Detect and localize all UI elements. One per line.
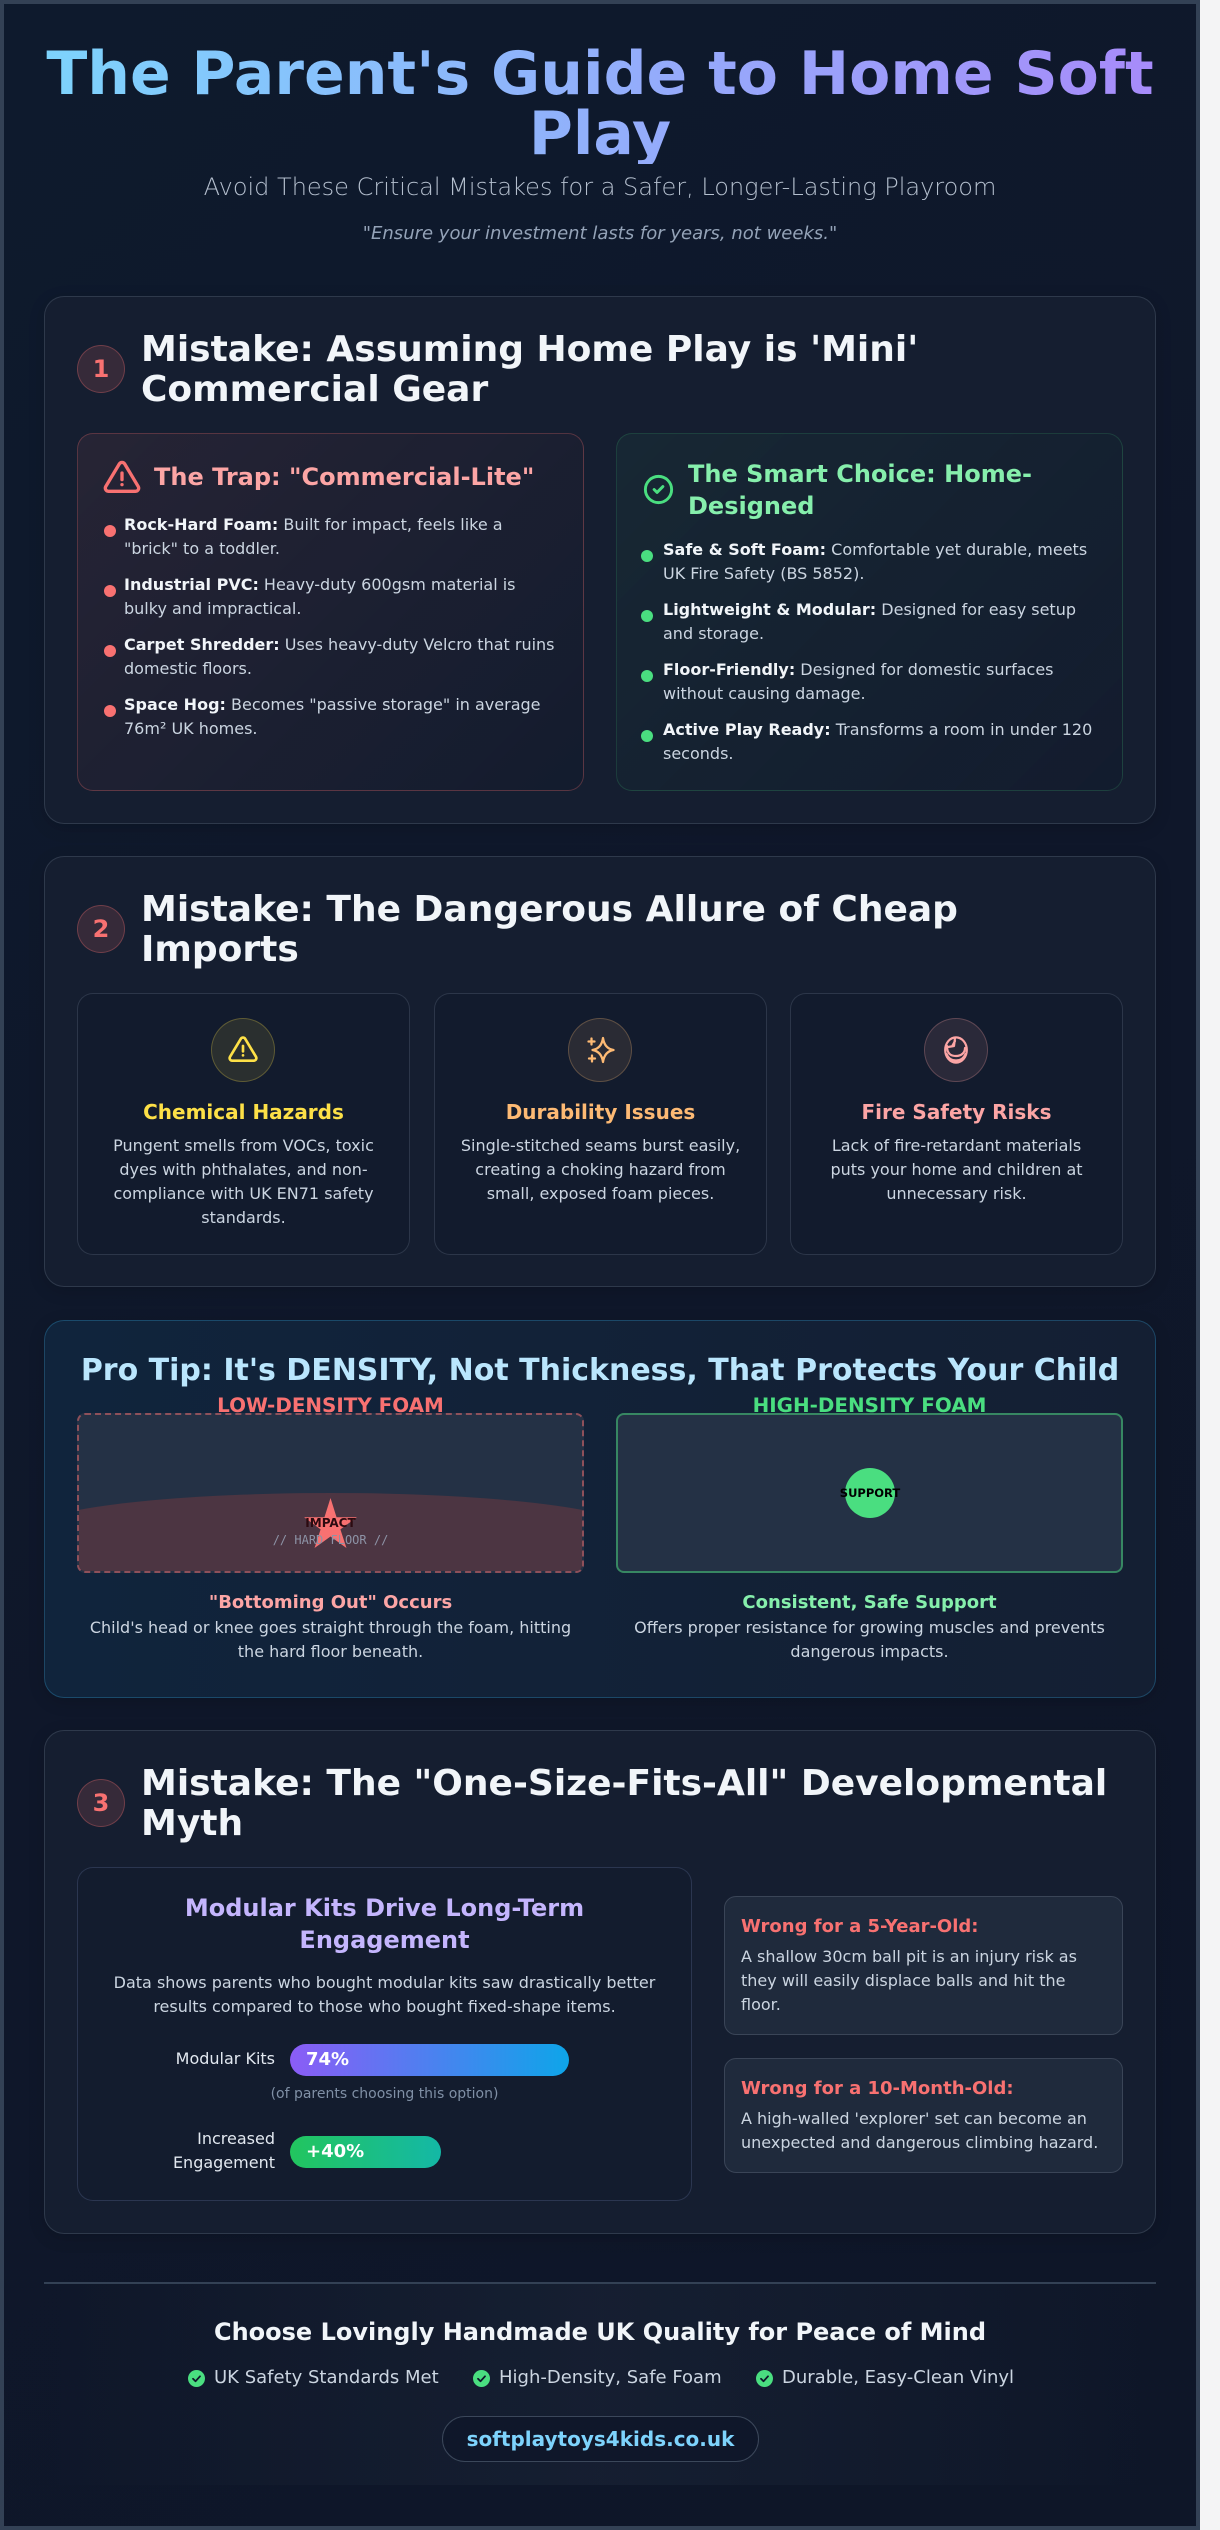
trap item: Industrial PVC: Heavy-duty 600gsm material is bbox=[124, 575, 516, 594]
durability heading: Durability Issues bbox=[506, 1100, 695, 1124]
smart item: Active Play Ready: Transforms a room in under 120 bbox=[663, 720, 1092, 739]
icon: flame bbox=[924, 1018, 988, 1082]
bottoming text: Child's head or knee goes straight through the foam, hitting bbox=[90, 1618, 571, 1637]
website pill: softplaytoys4kids.co.uk bbox=[467, 2427, 734, 2451]
panel: mistake 2 bbox=[44, 856, 1156, 1287]
step number 3 bbox=[77, 1779, 125, 1827]
card: fire safety risks bbox=[790, 993, 1123, 1255]
smart item bbox=[641, 540, 1087, 583]
icon: warning triangle bbox=[104, 460, 140, 493]
chart description bbox=[114, 1973, 656, 2016]
smart item bbox=[641, 720, 1092, 763]
title: Play bbox=[529, 99, 671, 169]
panel: the trap bbox=[77, 433, 584, 791]
chart heading: Engagement bbox=[299, 1926, 470, 1954]
chemical text: compliance with UK EN71 safety bbox=[113, 1184, 374, 1203]
chemical text: Pungent smells from VOCs, toxic bbox=[113, 1136, 374, 1155]
heading: mistake 3: Myth bbox=[141, 1803, 243, 1844]
label: increased engagement: Increased bbox=[197, 2129, 275, 2148]
smart item: UK Fire Safety (BS 5852). bbox=[663, 564, 864, 583]
bottoming heading: "Bottoming Out" Occurs bbox=[209, 1592, 452, 1613]
chart heading bbox=[185, 1894, 584, 1954]
heading: mistake 3 bbox=[141, 1763, 1107, 1844]
smart choice heading: Designed bbox=[688, 492, 814, 520]
trap item bbox=[104, 695, 540, 738]
support circle: SUPPORT bbox=[840, 1486, 900, 1500]
caption: safe support bbox=[634, 1592, 1105, 1661]
assurance: high density: High-Density, Safe Foam bbox=[499, 2367, 722, 2388]
durability text: small, exposed foam pieces. bbox=[487, 1184, 714, 1203]
trap item: Space Hog: Becomes "passive storage" in average bbox=[124, 695, 540, 714]
icon: warning triangle bbox=[211, 1018, 275, 1082]
support text: Offers proper resistance for growing muscles and prevents bbox=[634, 1618, 1105, 1637]
impact label: IMPACT bbox=[305, 1516, 356, 1530]
10-month text: A high-walled 'explorer' set can become an bbox=[741, 2109, 1087, 2128]
support circle bbox=[845, 1468, 895, 1518]
smart item: seconds. bbox=[663, 744, 733, 763]
title: The Parent's Guide to Home Soft bbox=[46, 39, 1154, 109]
10-month text: unexpected and dangerous climbing hazard. bbox=[741, 2133, 1098, 2152]
fire text: Lack of fire-retardant materials bbox=[832, 1136, 1081, 1155]
smart item: without causing damage. bbox=[663, 684, 866, 703]
support text: dangerous impacts. bbox=[790, 1642, 949, 1661]
smart item bbox=[641, 660, 1054, 703]
chart description: Data shows parents who bought modular kits saw drastically better bbox=[114, 1973, 655, 1992]
5-year text bbox=[741, 1947, 1077, 2014]
smart item bbox=[641, 600, 1076, 643]
floor label: // HARD FLOOR // bbox=[273, 1533, 388, 1547]
card: chemical hazards bbox=[77, 993, 410, 1255]
trap item: "brick" to a toddler. bbox=[124, 539, 280, 558]
smart choice heading: The Smart Choice: Home- bbox=[688, 460, 1032, 488]
support text bbox=[634, 1618, 1105, 1661]
header bbox=[46, 39, 1154, 244]
assurance: uk safety: UK Safety Standards Met bbox=[214, 2367, 439, 2388]
heading: mistake 1: Commercial Gear bbox=[141, 369, 488, 410]
5-year text: they will easily displace balls and hit the bbox=[741, 1971, 1065, 1990]
panel: mistake 1 bbox=[44, 296, 1156, 824]
step number 2 bbox=[77, 905, 125, 953]
chemical text: dyes with phthalates, and non- bbox=[119, 1160, 368, 1179]
label: high density: HIGH-DENSITY FOAM bbox=[753, 1394, 986, 1417]
trap item: bulky and impractical. bbox=[124, 599, 301, 618]
panel: mistake 3 bbox=[44, 1730, 1156, 2234]
footer heading: Choose Lovingly Handmade UK Quality for Peace of Mind bbox=[214, 2318, 986, 2346]
panel: the smart choice bbox=[616, 433, 1123, 791]
tagline quote: "Ensure your investment lasts for years, not weeks." bbox=[363, 223, 837, 244]
icon: check circle bbox=[644, 474, 674, 504]
title bbox=[44, 44, 1156, 164]
smart item: Floor-Friendly: Designed for domestic surfaces bbox=[663, 660, 1054, 679]
diagram: high density foam bbox=[616, 1413, 1123, 1573]
trap item bbox=[104, 515, 503, 558]
trap item: Rock-Hard Foam: Built for impact, feels like a bbox=[124, 515, 503, 534]
durability text: Single-stitched seams burst easily, bbox=[461, 1136, 740, 1155]
fire text bbox=[830, 1136, 1083, 1203]
heading: mistake 3: Mistake: The "One-Size-Fits-All" Developmental bbox=[141, 1763, 1107, 1804]
heading: mistake 2 bbox=[141, 889, 958, 970]
label: low density: LOW-DENSITY FOAM bbox=[217, 1394, 444, 1417]
durability text bbox=[461, 1136, 740, 1203]
bottoming text bbox=[90, 1618, 571, 1661]
pro tip heading: Pro Tip: It's DENSITY, Not Thickness, That Protects Your Child bbox=[81, 1353, 1119, 1388]
bar: +40% bbox=[290, 2136, 441, 2168]
label: modular kits: Modular Kits bbox=[176, 2049, 275, 2068]
fire heading: Fire Safety Risks bbox=[862, 1100, 1052, 1124]
trap heading: The Trap: "Commercial-Lite" bbox=[154, 463, 534, 491]
step number 1: 1 bbox=[93, 355, 109, 383]
5-year heading: Wrong for a 5-Year-Old: bbox=[741, 1916, 978, 1937]
durability text: creating a choking hazard from bbox=[475, 1160, 726, 1179]
bar: +40%: +40% bbox=[306, 2141, 364, 2162]
impact star bbox=[304, 1498, 357, 1548]
panel: modular kits chart bbox=[77, 1867, 692, 2201]
compressed foam dome bbox=[28, 1493, 633, 1573]
10-month heading: Wrong for a 10-Month-Old: bbox=[741, 2078, 1014, 2099]
chart description: results compared to those who bought fixed-shape items. bbox=[153, 1997, 616, 2016]
trap item bbox=[104, 575, 516, 618]
bar note: (of parents choosing this option) bbox=[271, 2086, 498, 2102]
chart heading: Modular Kits Drive Long-Term bbox=[185, 1894, 584, 1922]
footer bbox=[44, 2282, 1156, 2485]
heading: mistake 1: Mistake: Assuming Home Play is 'Mini' bbox=[141, 329, 918, 370]
fire text: unnecessary risk. bbox=[886, 1184, 1027, 1203]
panel: pro tip density bbox=[44, 1320, 1156, 1698]
callout: 10-month-old bbox=[724, 2058, 1123, 2173]
bar: 74%: 74% bbox=[306, 2049, 349, 2070]
label: increased engagement: Engagement bbox=[173, 2153, 275, 2172]
trap item: domestic floors. bbox=[124, 659, 252, 678]
10-month text bbox=[741, 2109, 1098, 2152]
trap item: 76m² UK homes. bbox=[124, 719, 258, 738]
support heading: Consistent, Safe Support bbox=[742, 1592, 997, 1613]
5-year text: floor. bbox=[741, 1995, 781, 2014]
step number 3: 3 bbox=[93, 1789, 109, 1817]
smart item: Lightweight & Modular: Designed for easy setup bbox=[663, 600, 1076, 619]
callout: 5-year-old bbox=[724, 1896, 1123, 2035]
assurance: durable vinyl: Durable, Easy-Clean Vinyl bbox=[782, 2367, 1014, 2388]
heading: mistake 2: Imports bbox=[141, 929, 299, 970]
chemical text bbox=[113, 1136, 374, 1227]
heading: mistake 2: Mistake: The Dangerous Allure of Cheap bbox=[141, 889, 958, 930]
caption: bottoming out bbox=[90, 1592, 571, 1661]
step number 1 bbox=[77, 345, 125, 393]
label: increased engagement bbox=[173, 2129, 275, 2172]
smart item: Safe & Soft Foam: Comfortable yet durable, meets bbox=[663, 540, 1087, 559]
icon: sparkles bbox=[568, 1018, 632, 1082]
trap item bbox=[104, 635, 555, 678]
website pill bbox=[442, 2416, 759, 2462]
heading: mistake 1 bbox=[141, 329, 918, 410]
5-year text: A shallow 30cm ball pit is an injury risk as bbox=[741, 1947, 1077, 1966]
smart choice heading bbox=[688, 460, 1032, 520]
bottoming text: the hard floor beneath. bbox=[238, 1642, 423, 1661]
diagram: low density foam bbox=[77, 1413, 584, 1573]
bar: 74% bbox=[290, 2044, 569, 2076]
chemical text: standards. bbox=[201, 1208, 286, 1227]
trap item: Carpet Shredder: Uses heavy-duty Velcro that ruins bbox=[124, 635, 555, 654]
subtitle: Avoid These Critical Mistakes for a Safer, Longer-Lasting Playroom bbox=[204, 173, 996, 201]
card: durability issues bbox=[434, 993, 767, 1255]
smart item: and storage. bbox=[663, 624, 764, 643]
chemical heading: Chemical Hazards bbox=[143, 1100, 344, 1124]
step number 2: 2 bbox=[93, 915, 109, 943]
fire text: puts your home and children at bbox=[830, 1160, 1083, 1179]
